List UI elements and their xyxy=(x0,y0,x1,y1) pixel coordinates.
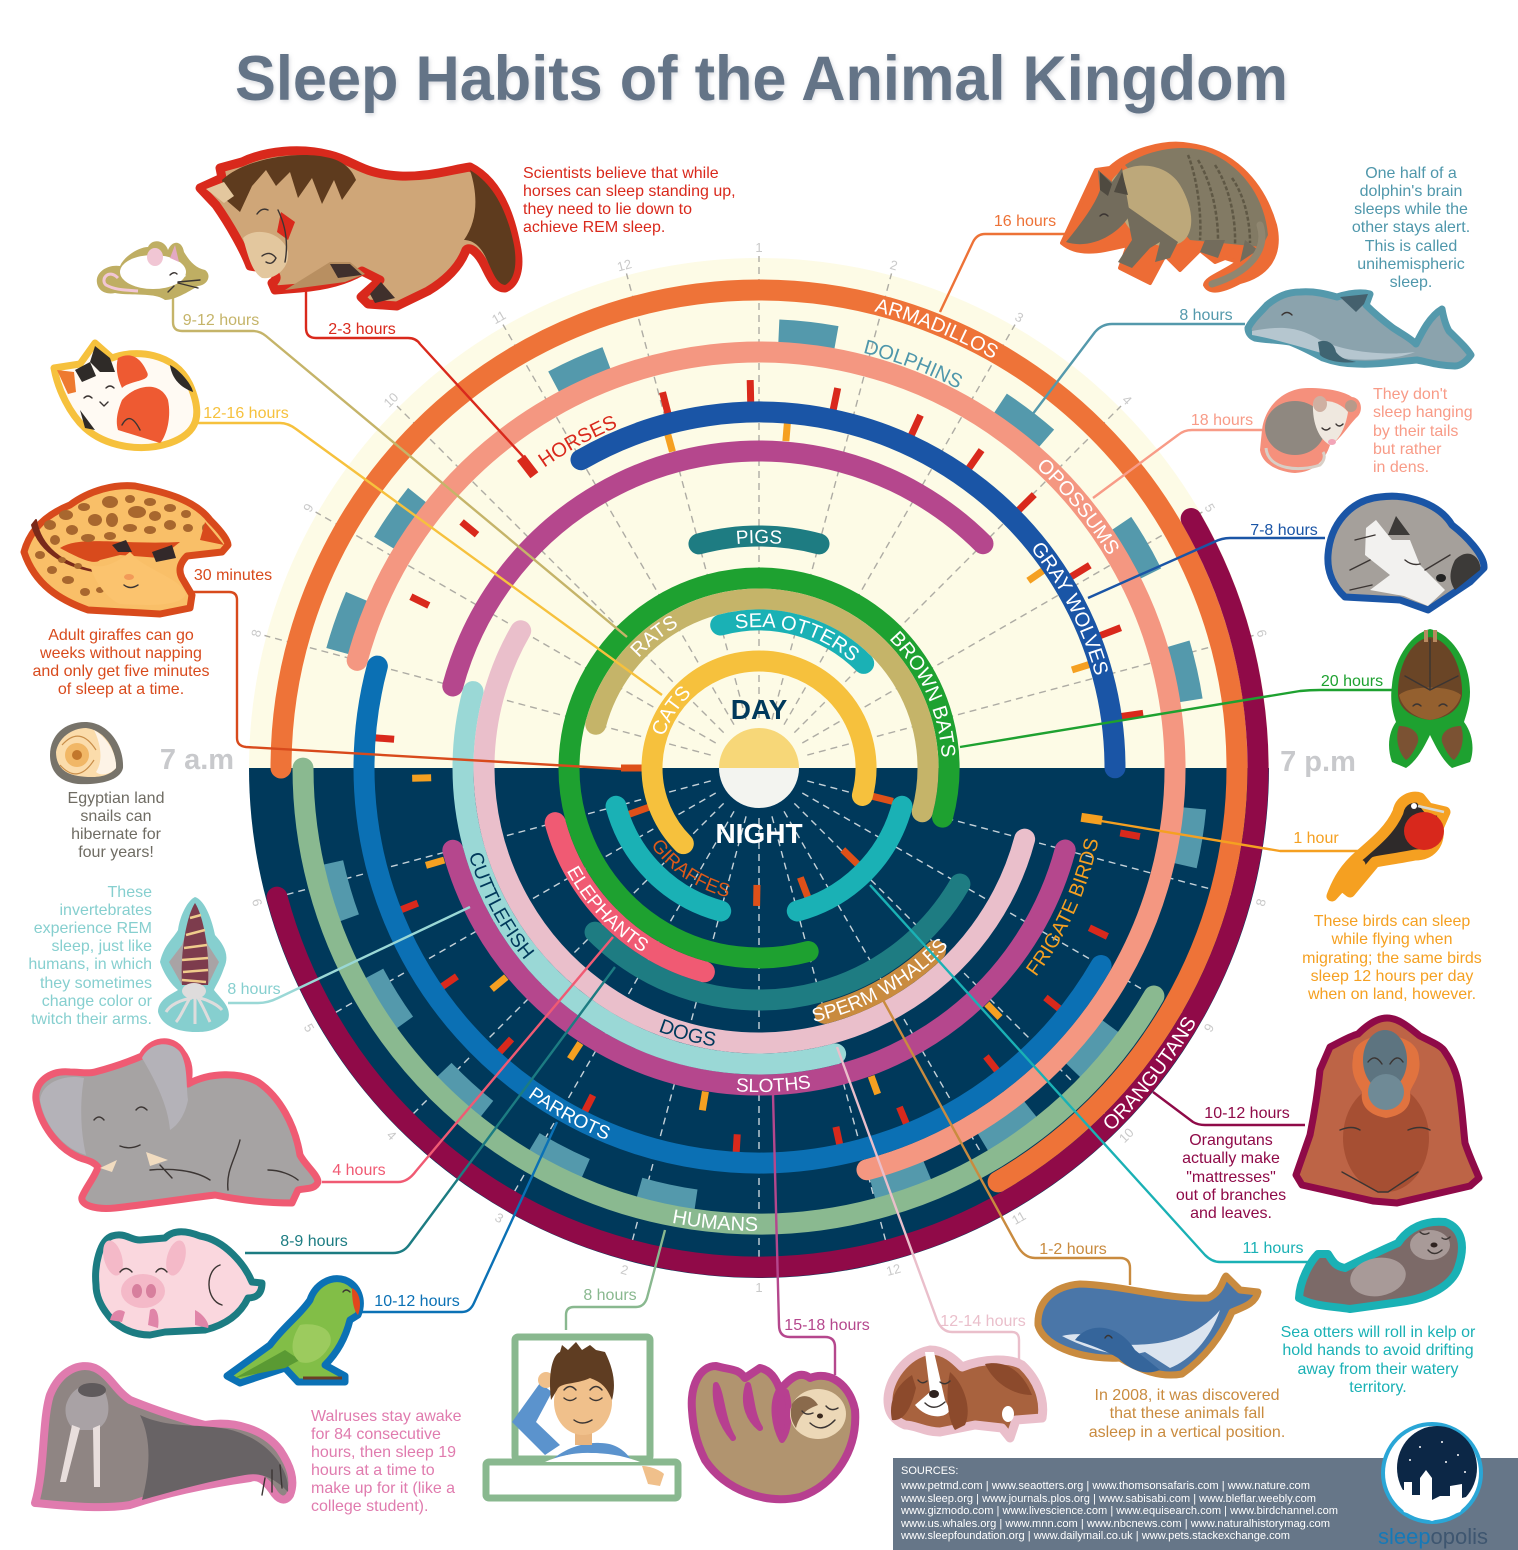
sources panel xyxy=(893,1458,1518,1550)
hour numbers: 1 xyxy=(755,1280,763,1295)
text: dolphin fact: sleeps while the xyxy=(1354,201,1468,218)
icon: elephant xyxy=(36,1042,318,1208)
title: Sleep Habits of the Animal Kingdom xyxy=(235,44,1288,114)
text: sea otter fact: hold hands to avoid drifting xyxy=(1282,1342,1474,1359)
text: opossum fact: They don't xyxy=(1373,386,1448,403)
text: opossum fact: sleep hanging xyxy=(1373,404,1473,421)
species arc labels: HUMANS xyxy=(673,1210,758,1231)
text: cuttlefish fact: twitch their arms. xyxy=(31,1011,152,1028)
text: whale fact: asleep in a vertical position. xyxy=(1089,1424,1285,1441)
hour numbers: 6 xyxy=(1254,628,1270,639)
text: snail fact: four years! xyxy=(78,844,154,861)
hour numbers: 12 xyxy=(885,1261,902,1279)
icon: parrot xyxy=(227,1279,360,1383)
icon: giraffe xyxy=(24,486,228,614)
giraffe sleep ticks xyxy=(621,764,894,906)
duration labels: 8-9 hours xyxy=(280,1233,348,1250)
icon: dolphin xyxy=(1248,292,1471,366)
duration labels: 9-12 hours xyxy=(183,312,259,329)
hour numbers: 1 xyxy=(755,240,763,255)
text: walrus fact: Walruses stay awake xyxy=(311,1408,462,1425)
text: dolphin fact: dolphin's brain xyxy=(1360,183,1462,200)
text: frigate bird fact: sleep 12 hours per day xyxy=(1311,968,1473,985)
leader lines xyxy=(173,234,1392,1375)
text: snail fact: hibernate for xyxy=(71,826,162,843)
duration labels: 2-3 hours xyxy=(328,321,396,338)
logo: sleepopolis xyxy=(1378,1424,1488,1549)
icon: orangutan xyxy=(1296,1018,1479,1203)
text: walrus fact: make up for it (like a xyxy=(311,1480,455,1497)
species arc labels xyxy=(470,299,1195,1231)
sources panel: www.petmd.com | www.seaotters.org | www.thomsonsafaris.com | www.nature.com xyxy=(900,1480,1310,1492)
text: cuttlefish fact: change color or xyxy=(42,993,153,1010)
text: opossum fact: but rather xyxy=(1373,441,1442,458)
radial sleep clock chart xyxy=(248,240,1270,1295)
sources panel: www.sleepfoundation.org | www.dailymail.co.uk | www.pets.stackexchange.com xyxy=(900,1530,1290,1542)
species arc labels: ORANGUTANS xyxy=(1104,1017,1195,1128)
species arc labels: GRAY WOLVES xyxy=(1033,543,1108,674)
sun and moon centre xyxy=(719,728,799,808)
text: frigate bird fact: migrating; the same birds xyxy=(1302,950,1482,967)
duration labels: 10-12 hours xyxy=(1204,1105,1290,1122)
duration labels: 12-14 hours xyxy=(940,1313,1026,1330)
text: sea otter fact: away from their watery xyxy=(1298,1361,1458,1378)
day label: DAY xyxy=(731,694,788,725)
icon: armadillo xyxy=(1062,144,1277,291)
text: sea otter fact: Sea otters will roll in kelp or xyxy=(1281,1324,1476,1341)
text: walrus fact: hours at a time to xyxy=(311,1462,435,1479)
icon: bat xyxy=(1389,629,1472,768)
duration labels: 1 hour xyxy=(1293,830,1339,847)
species arc labels: FRIGATE BIRDS xyxy=(1026,838,1098,976)
duration labels: 20 hours xyxy=(1321,673,1383,690)
species arc labels: DOGS xyxy=(660,1019,716,1046)
text: cuttlefish fact: humans, in which xyxy=(28,956,152,973)
species arc labels: DOLPHINS xyxy=(864,340,962,388)
species arc labels: PIGS xyxy=(737,530,782,544)
hour numbers: 3 xyxy=(492,1210,506,1226)
text: giraffe fact: weeks without napping xyxy=(39,645,202,662)
species arc labels: ARMADILLOS xyxy=(874,299,998,358)
icon: frigate bird xyxy=(1332,797,1445,896)
icon: snail xyxy=(50,722,123,784)
text: cuttlefish fact: sleep, just like xyxy=(52,938,152,955)
hour numbers: 9 xyxy=(300,501,317,515)
duration labels: 10-12 hours xyxy=(374,1293,460,1310)
text: cuttlefish fact: invertebrates xyxy=(60,902,152,919)
species arc labels: GIRAFFES xyxy=(654,840,730,896)
sources panel: www.us.whales.org | www.mnn.com | www.nbcnews.com | www.naturalhistorymag.com xyxy=(900,1518,1330,1530)
text: whale fact xyxy=(1089,1387,1285,1441)
text: giraffe fact: of sleep at a time. xyxy=(58,681,184,698)
species arc labels: PARROTS xyxy=(528,1087,610,1139)
text: walrus fact: college student). xyxy=(311,1498,428,1515)
icon: horse xyxy=(200,151,518,306)
text: frigate bird fact: These birds can sleep xyxy=(1314,913,1470,930)
dolphin sleep blocks xyxy=(144,153,1374,1383)
text: dolphin fact: unihemispheric xyxy=(1357,256,1465,273)
icon: sleeping man xyxy=(486,1337,678,1498)
text: horse fact: they need to lie down to xyxy=(523,201,692,218)
text: dolphin fact: sleep. xyxy=(1390,274,1432,291)
night half background xyxy=(249,768,1269,1278)
text: whale fact: that these animals fall xyxy=(1110,1405,1264,1422)
duration labels: 15-18 hours xyxy=(784,1317,870,1334)
species arc labels: HORSES xyxy=(538,416,616,467)
icon: cuttlefish xyxy=(158,897,229,1032)
hour numbers: 8 xyxy=(248,628,264,639)
night label: NIGHT xyxy=(715,818,803,849)
text: walrus fact xyxy=(311,1408,462,1515)
hour grid night xyxy=(276,781,1242,1268)
frigate bird sleep ticks xyxy=(412,422,1103,1111)
icon: cat xyxy=(54,343,197,448)
hour numbers: 10 xyxy=(1116,1125,1137,1146)
7 p.m label: 7 p.m xyxy=(1280,746,1356,778)
hour numbers: 3 xyxy=(1012,309,1026,326)
hour numbers: 6 xyxy=(249,897,265,908)
species arc labels: CATS xyxy=(653,686,690,734)
species arc labels: ELEPHANTS xyxy=(567,866,648,951)
7 a.m label: 7 a.m xyxy=(160,744,234,776)
hour numbers: 4 xyxy=(384,1127,400,1143)
text: sea otter fact xyxy=(1281,1324,1476,1396)
species arc labels: SLOTHS xyxy=(736,1076,810,1092)
text: cuttlefish fact: These xyxy=(108,884,152,901)
hour numbers: 9 xyxy=(1201,1021,1217,1035)
species arc labels: RATS xyxy=(630,616,677,657)
hour numbers: 4 xyxy=(1119,392,1135,408)
hour numbers: 11 xyxy=(1009,1208,1028,1228)
hour numbers: 11 xyxy=(489,307,508,327)
hour numbers: 2 xyxy=(888,257,899,273)
text: dolphin fact xyxy=(1352,165,1470,291)
duration labels: 8 hours xyxy=(583,1287,637,1304)
duration labels: 30 minutes xyxy=(194,567,272,584)
species arc labels: BROWN BATS xyxy=(890,630,956,756)
text: snail fact: Egyptian land xyxy=(68,790,164,807)
duration labels: 7-8 hours xyxy=(1250,522,1318,539)
text: orangutan fact xyxy=(1176,1132,1286,1222)
day half background xyxy=(249,258,1269,768)
text: orangutan fact: "mattresses" xyxy=(1186,1169,1276,1186)
species arc labels: CUTTLEFISH xyxy=(470,853,534,960)
icon: walrus xyxy=(35,1366,292,1507)
text: horse fact: achieve REM sleep. xyxy=(523,219,665,236)
text: horse fact xyxy=(523,165,736,236)
duration labels xyxy=(183,213,1383,1334)
hour numbers: 5 xyxy=(1201,501,1218,515)
duration labels: 16 hours xyxy=(994,213,1056,230)
duration labels: 8 hours xyxy=(1179,307,1233,324)
text: opossum fact xyxy=(1373,386,1473,476)
sleep duration arcs xyxy=(77,86,1441,1450)
horse sleep ticks xyxy=(374,380,1144,1155)
sources panel: www.sleep.org | www.journals.plos.org | www.sabisabi.com | www.bleflar.weebly.com xyxy=(900,1493,1316,1505)
text: cuttlefish fact xyxy=(28,884,153,1028)
icon: opossum xyxy=(1260,388,1361,473)
duration labels: 1-2 hours xyxy=(1039,1241,1107,1258)
text: frigate bird fact: when on land, however. xyxy=(1307,986,1476,1003)
sources panel: www.gizmodo.com | www.livescience.com | www.equisearch.com | www.birdchannel.com xyxy=(900,1505,1338,1517)
duration labels: 4 hours xyxy=(332,1162,386,1179)
icon: whale xyxy=(1038,1276,1258,1375)
text: whale fact: In 2008, it was discovered xyxy=(1094,1387,1280,1404)
text: walrus fact: hours, then sleep 19 xyxy=(311,1444,456,1461)
text: horse fact: horses can sleep standing up, xyxy=(523,183,736,200)
hour numbers xyxy=(248,240,1270,1295)
hour numbers: 12 xyxy=(615,256,633,274)
sources panel: SOURCES: xyxy=(901,1465,958,1477)
icon: wolf xyxy=(1328,496,1484,610)
text: orangutan fact: Orangutans xyxy=(1189,1132,1273,1149)
hour numbers: 5 xyxy=(301,1021,317,1035)
duration labels: 8 hours xyxy=(227,981,281,998)
text: horse fact: Scientists believe that while xyxy=(523,165,719,182)
hour numbers: 10 xyxy=(381,390,401,410)
text: giraffe fact xyxy=(32,627,210,698)
icon: pig xyxy=(96,1232,262,1335)
hour numbers: 2 xyxy=(619,1262,630,1278)
text: giraffe fact: and only get five minutes xyxy=(32,663,210,680)
icon: sea otter xyxy=(1299,1222,1462,1309)
text: orangutan fact: actually make xyxy=(1182,1150,1280,1167)
hour numbers: 8 xyxy=(1253,897,1269,908)
species arc labels: SEA OTTERS xyxy=(736,613,859,660)
duration labels: 12-16 hours xyxy=(203,405,289,422)
duration labels: 18 hours xyxy=(1191,412,1253,429)
text: giraffe fact: Adult giraffes can go xyxy=(48,627,194,644)
text: cuttlefish fact: experience REM xyxy=(34,920,152,937)
text: snail fact: snails can xyxy=(80,808,152,825)
icon: mouse xyxy=(97,241,209,300)
species arc labels: SPERM WHALES xyxy=(812,938,946,1022)
text: walrus fact: for 84 consecutive xyxy=(311,1426,441,1443)
logo: sleepopolis: sleepopolis xyxy=(1378,1524,1488,1549)
text: dolphin fact: One half of a xyxy=(1365,165,1457,182)
icon: dog xyxy=(888,1350,1043,1438)
text: dolphin fact: This is called xyxy=(1365,238,1457,255)
text: dolphin fact: other stays alert. xyxy=(1352,219,1470,236)
text: cuttlefish fact: they sometimes xyxy=(40,975,152,992)
text: frigate bird fact xyxy=(1302,913,1482,1003)
text: opossum fact: by their tails xyxy=(1373,423,1458,440)
icon: sloth xyxy=(692,1366,855,1499)
text: opossum fact: in dens. xyxy=(1373,459,1429,476)
species arc labels: OPOSSUMS xyxy=(1039,460,1118,554)
text: orangutan fact: and leaves. xyxy=(1190,1205,1272,1222)
hour grid day xyxy=(264,256,1254,755)
text: sea otter fact: territory. xyxy=(1349,1379,1407,1396)
text: orangutan fact: out of branches xyxy=(1176,1187,1286,1204)
text: frigate bird fact: while flying when xyxy=(1331,931,1452,948)
text: snail fact xyxy=(68,790,164,861)
duration labels: 11 hours xyxy=(1242,1240,1304,1257)
